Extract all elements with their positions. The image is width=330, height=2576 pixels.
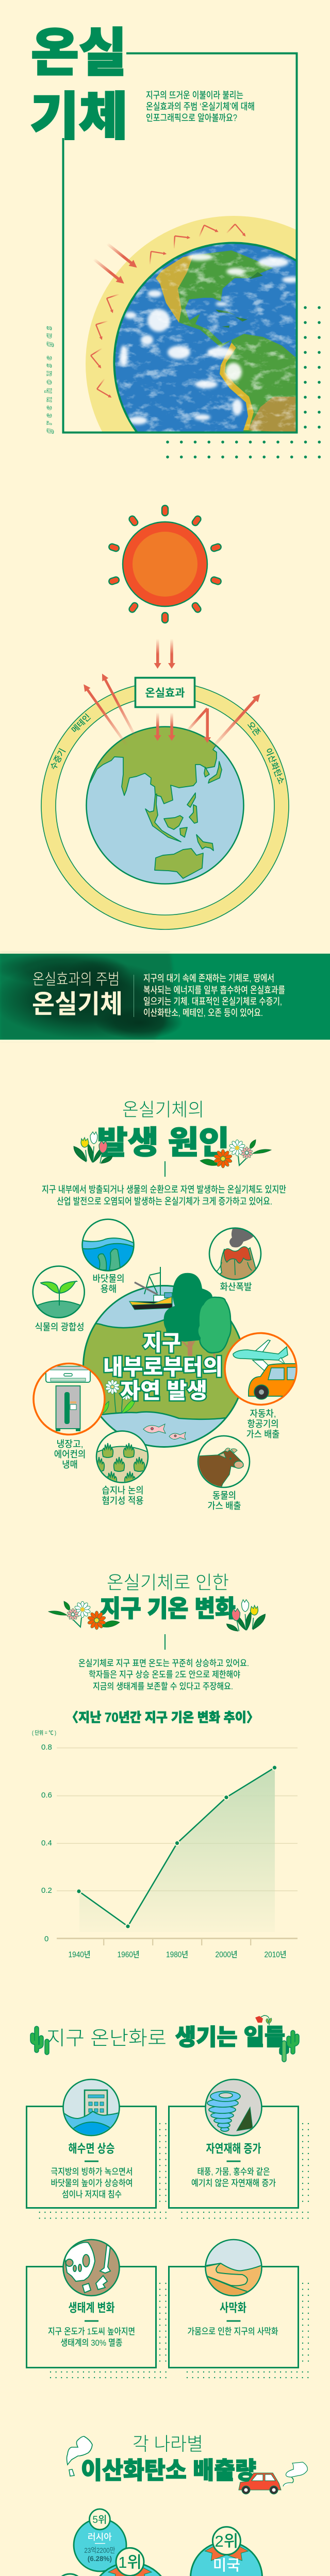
icon: skull and bones bbox=[65, 2242, 110, 2293]
heading bbox=[100, 1572, 236, 1622]
banner heading bbox=[32, 971, 123, 1019]
label bbox=[54, 1439, 86, 1470]
globe heading: 자연 발생 bbox=[120, 1379, 207, 1403]
line chart: 0.6 bbox=[41, 1791, 52, 1800]
earth illustration bbox=[82, 721, 243, 884]
panel: banner bbox=[0, 952, 330, 1042]
card text: 생태계의 30% 멸종 bbox=[61, 2338, 123, 2348]
icon: sea water bbox=[81, 1218, 135, 1272]
card text bbox=[51, 2142, 133, 2199]
bubble: EU bbox=[38, 2574, 102, 2576]
label: 에어컨의 bbox=[54, 1449, 86, 1460]
label box: greenhouse effect: 온실효과 bbox=[145, 687, 185, 699]
label: 식물의 광합성 bbox=[35, 1322, 85, 1332]
banner heading: 온실효과의 주범 bbox=[32, 971, 120, 988]
bubble: China bbox=[90, 2548, 171, 2576]
card text: 섬이나 저지대 침수 bbox=[62, 2190, 122, 2199]
card text bbox=[191, 2142, 276, 2188]
heading: 각 나라별 bbox=[133, 2433, 203, 2454]
intro text: 인포그래픽으로 알아볼까요? bbox=[146, 113, 237, 123]
ring gas labels: 오존 bbox=[245, 720, 261, 738]
bubble: Russia: 23억2200만 bbox=[84, 2546, 115, 2554]
intro text bbox=[146, 90, 255, 123]
line chart: 1940년 bbox=[68, 1950, 91, 1959]
line chart: 1980년 bbox=[166, 1950, 188, 1959]
line chart: 2010년 bbox=[264, 1950, 287, 1959]
intro text bbox=[42, 1184, 286, 1207]
label: 동물의 bbox=[212, 1490, 236, 1501]
heading: 온실기체로 인한 bbox=[107, 1572, 229, 1593]
globe heading bbox=[103, 1331, 223, 1403]
line chart: ( 단위 = ℃ ) bbox=[32, 1730, 56, 1736]
heading: 지구 온난화로 bbox=[46, 2028, 167, 2049]
intro text: 산업 발전으로 오염되어 발생하는 온실기체가 크게 증가하고 있어요. bbox=[57, 1196, 272, 1207]
icon: daisies on globe bbox=[103, 1380, 136, 1413]
icon: flooded building bbox=[64, 2090, 119, 2135]
bubble: Russia: 러시아 bbox=[88, 2532, 112, 2542]
card text: 극지방의 빙하가 녹으면서 bbox=[51, 2167, 133, 2177]
ring gas labels: 이산화탄소 bbox=[263, 747, 286, 786]
card text: 사막화 bbox=[220, 2301, 246, 2314]
icon: trees bbox=[164, 1273, 231, 1358]
intro text: 지구 내부에서 방출되거나 생물의 순환으로 자연 발생하는 온실기체도 있지만 bbox=[42, 1184, 286, 1195]
card: ecosystem change bbox=[27, 2240, 156, 2368]
intro text bbox=[78, 1658, 249, 1691]
panel: temperature change bbox=[32, 1572, 298, 1959]
label box: greenhouse effect bbox=[135, 678, 195, 707]
icon: rice paddy bbox=[94, 1431, 150, 1486]
banner text: 일으키는 기체. 대표적인 온실기체로 수증기, bbox=[143, 996, 282, 1007]
card text bbox=[48, 2301, 135, 2348]
vertical label: greenhouse gas: greenhouse gas bbox=[43, 326, 54, 434]
chart title: 〈지난 70년간 지구 기온 변화 추이〉 bbox=[66, 1710, 259, 1725]
card text: 생태계 변화 bbox=[68, 2301, 114, 2314]
dots pattern bbox=[40, 2124, 309, 2378]
icon: plane and car bbox=[225, 1333, 302, 1404]
label: 가스 배출 bbox=[246, 1429, 279, 1439]
label: 가스 배출 bbox=[207, 1501, 241, 1511]
icon: sprout bbox=[32, 1265, 85, 1318]
heading: 발생 원인 bbox=[97, 1125, 229, 1161]
icon: daisies bbox=[200, 1140, 271, 1168]
card text: 가뭄으로 인한 지구의 사막화 bbox=[188, 2327, 278, 2336]
icon: tulips bbox=[74, 1132, 112, 1163]
icon: tulips bbox=[227, 1600, 265, 1631]
label: 혐기성 적용 bbox=[102, 1496, 143, 1506]
bubble: Russia: (6.28%) bbox=[88, 2555, 112, 2563]
card text: 해수면 상승 bbox=[68, 2142, 114, 2155]
icon: ship bbox=[129, 1267, 172, 1310]
atmosphere ring bbox=[41, 682, 289, 929]
banner text: 이산화탄소, 메테인, 오존 등이 있어요. bbox=[143, 1008, 263, 1018]
bubble: USA: 미국 bbox=[213, 2557, 240, 2574]
red arrows: incoming and reflected bbox=[91, 224, 244, 396]
icon: volcano bbox=[209, 1225, 263, 1283]
banner text: 복사되는 에너지를 일부 흡수하여 온실효과를 bbox=[143, 985, 285, 995]
icon: tornado bbox=[207, 2091, 253, 2131]
heading: 이산화탄소 배출량 bbox=[81, 2457, 256, 2484]
panel: causes bbox=[31, 1099, 302, 1511]
heading bbox=[46, 2025, 285, 2050]
icon: sun bbox=[108, 505, 222, 623]
intro text: 온실효과의 주범 ‘온실기체’에 대해 bbox=[146, 101, 255, 112]
central globe bbox=[77, 1267, 248, 1447]
panel: CO2 emissions by country bbox=[33, 2433, 307, 2576]
icon: cacti bbox=[32, 2028, 297, 2060]
card text bbox=[188, 2301, 278, 2336]
label: 자동차, bbox=[250, 1409, 276, 1419]
intro text: 학자들은 지구 상승 온도를 2도 안으로 제한해야 bbox=[89, 1670, 240, 1680]
card text: 태풍, 가뭄, 홍수와 같은 bbox=[197, 2167, 270, 2177]
line chart: 1960년 bbox=[118, 1950, 139, 1959]
card: sea level rise bbox=[27, 2079, 156, 2208]
line chart: 0.8 bbox=[41, 1743, 52, 1752]
bubble: Russia: 5위 bbox=[92, 2514, 107, 2526]
icon: smoke left bbox=[67, 2436, 92, 2476]
line chart: 0.2 bbox=[41, 1886, 52, 1895]
heading: 생기는 일들 bbox=[175, 2025, 285, 2050]
heading bbox=[97, 1099, 229, 1161]
label bbox=[207, 1490, 241, 1511]
label: 항공기의 bbox=[248, 1419, 278, 1429]
line chart bbox=[32, 1730, 298, 1959]
card text: 바닷물의 높이가 상승하여 bbox=[51, 2178, 133, 2188]
globe heading: 내부로부터의 bbox=[103, 1355, 223, 1379]
icon: red car with smoke bbox=[239, 2462, 307, 2494]
label: 화산폭발 bbox=[220, 1282, 252, 1292]
photo frame with earth bbox=[62, 53, 298, 434]
heading: 지구 기온 변화 bbox=[100, 1595, 236, 1622]
icon: daisies bbox=[48, 1601, 120, 1630]
bubble: Russia bbox=[74, 2509, 126, 2571]
card text: 예기치 않은 자연재해 증가 bbox=[191, 2178, 276, 2188]
line chart: 2000년 bbox=[216, 1950, 237, 1959]
heading: 온실기체의 bbox=[122, 1099, 204, 1120]
icon: cow bbox=[196, 1436, 250, 1489]
bubble: USA bbox=[191, 2527, 262, 2576]
ring gas labels bbox=[48, 712, 286, 786]
label: 바닷물의 bbox=[93, 1274, 125, 1284]
label bbox=[246, 1409, 279, 1439]
dots pattern bbox=[168, 308, 320, 457]
label: 냉매 bbox=[62, 1460, 78, 1470]
heading bbox=[81, 2433, 256, 2484]
title: 기체 bbox=[30, 88, 128, 146]
card: desertification bbox=[169, 2240, 298, 2368]
panel: hero bbox=[31, 26, 321, 459]
line chart: 0 bbox=[44, 1935, 48, 1943]
line chart: 0.4 bbox=[41, 1839, 52, 1848]
intro text: 지금의 생태계를 보존할 수 있다고 주장해요. bbox=[93, 1682, 233, 1691]
title: 온실 bbox=[31, 24, 127, 82]
label bbox=[93, 1274, 125, 1294]
ring gas labels: 수증기 bbox=[48, 747, 68, 771]
arrows: radiation bbox=[87, 639, 256, 749]
icon: fish bbox=[143, 1424, 186, 1439]
label: 용해 bbox=[101, 1284, 117, 1294]
title bbox=[30, 24, 128, 146]
panel: effects of warming bbox=[27, 2015, 309, 2378]
intro text: 온실기체로 지구 표면 온도는 꾸준히 상승하고 있어요. bbox=[78, 1658, 249, 1668]
banner text: 지구의 대기 속에 존재하는 기체로, 땅에서 bbox=[143, 973, 274, 984]
card text: 자연재해 증가 bbox=[206, 2142, 261, 2155]
panel: greenhouse effect diagram bbox=[41, 505, 289, 929]
card text: 지구 온도가 1도씨 높아지면 bbox=[48, 2327, 135, 2336]
icon: wilted flower bbox=[255, 2015, 272, 2025]
label: 습지나 논의 bbox=[102, 1485, 143, 1496]
globe heading: 지구 bbox=[143, 1331, 181, 1355]
intro text: 지구의 뜨거운 이불이라 불리는 bbox=[146, 90, 243, 100]
bubble: China: 1위 bbox=[118, 2553, 142, 2571]
label: 냉장고, bbox=[57, 1439, 84, 1449]
icon: desert dunes bbox=[206, 2263, 261, 2295]
card: natural disasters bbox=[169, 2079, 298, 2208]
icon: air conditioner and fridge bbox=[34, 1363, 105, 1434]
label bbox=[102, 1485, 143, 1506]
bubble: USA: 2위 bbox=[215, 2532, 238, 2550]
banner heading: 온실기체 bbox=[32, 990, 123, 1019]
ring gas labels: 메테인 bbox=[70, 712, 92, 735]
banner text bbox=[143, 973, 285, 1018]
